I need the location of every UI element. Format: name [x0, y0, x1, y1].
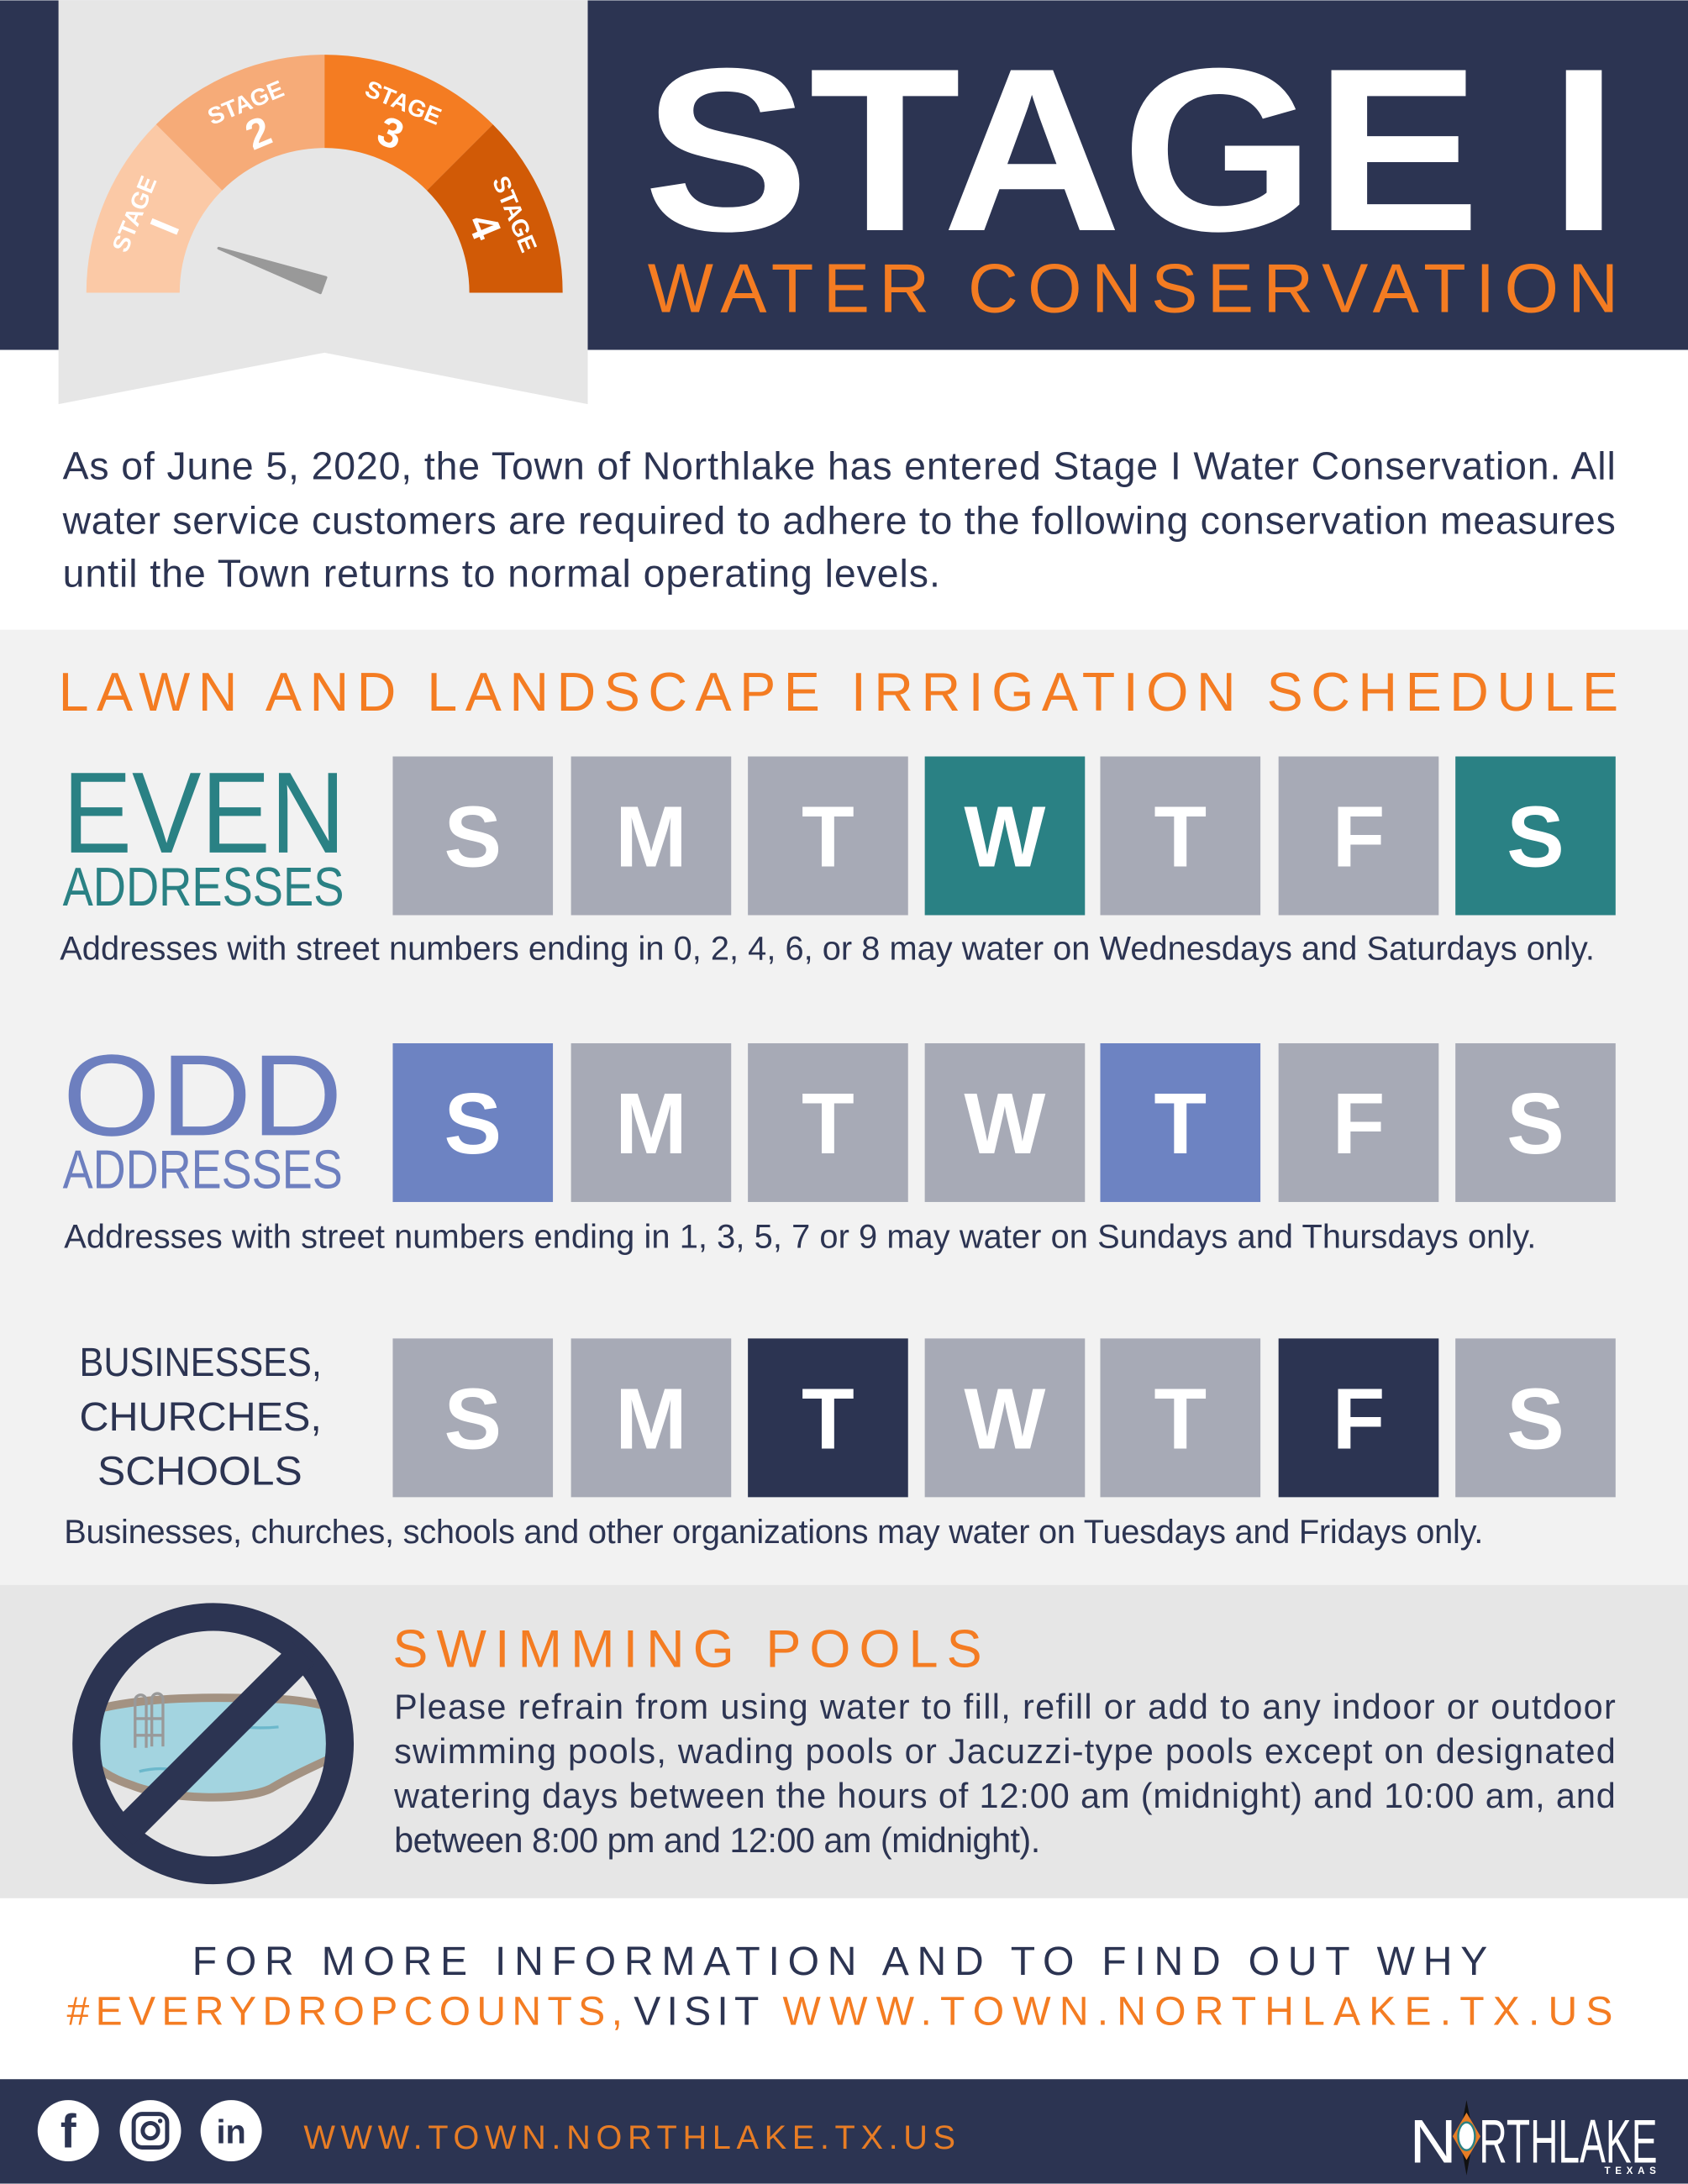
intro paragraph: [62, 444, 1616, 595]
pools paragraph: Please refrain from using water to fill, refill or add to any indoor or outdoor: [394, 1687, 1616, 1726]
businesses day grid: M: [615, 1370, 687, 1467]
more info text: WWW.TOWN.NORTHLAKE.TX.US: [783, 1989, 1612, 2034]
even caption: Addresses with street numbers ending in 0, 2, 4, 6, or 8 may water on Wednesdays and Saturdays only.: [60, 931, 1595, 968]
more info text: [67, 1939, 1612, 2034]
gauge: stage 1 sector: [87, 124, 222, 293]
odd day grid: W: [964, 1075, 1045, 1172]
gauge tab: [59, 0, 588, 404]
gauge: stage 4 sector: [427, 124, 563, 293]
gauge: stage 2 sector: [156, 55, 324, 191]
odd addresses label: ODD: [63, 1031, 343, 1160]
icon: instagram: [120, 2100, 181, 2161]
northlake logo: N: [1409, 2108, 1457, 2176]
businesses label: BUSINESSES,: [79, 1340, 322, 1385]
gauge label 3: 3: [371, 107, 411, 159]
even day grid: T: [802, 788, 855, 885]
businesses day grid: T: [802, 1370, 855, 1467]
businesses day grid: S: [444, 1370, 502, 1467]
more info text: #EVERYDROPCOUNTS,: [67, 1989, 623, 2034]
footer band: [0, 2079, 1688, 2184]
gauge: stage 3 sector: [324, 55, 493, 191]
subtitle: WATER CONSERVATION: [648, 249, 1618, 328]
northlake logo: TEXAS: [1605, 2166, 1656, 2176]
intro paragraph: As of June 5, 2020, the Town of Northlake has entered Stage I Water Conservation. All: [63, 444, 1616, 488]
pools section background: [0, 1585, 1688, 1898]
title: STAGE I: [644, 19, 1618, 280]
gauge label 2: STAGE: [203, 75, 287, 130]
more info text: FOR MORE INFORMATION AND TO FIND OUT WHY: [192, 1939, 1487, 1984]
businesses day grid: S: [1507, 1370, 1564, 1467]
pools heading: SWIMMING POOLS: [392, 1620, 982, 1679]
intro paragraph: water service customers are required to adhere to the following conservation measures: [62, 498, 1616, 542]
odd day grid: M: [615, 1075, 687, 1172]
gauge label 4: STAGE: [487, 172, 543, 256]
odd day grid: S: [1507, 1075, 1564, 1172]
even day grid: W: [964, 788, 1045, 885]
gauge label 1: STAGE: [107, 172, 161, 256]
odd day grid: S: [444, 1075, 502, 1172]
odd day grid: [392, 1043, 1616, 1202]
northlake logo: [1409, 2100, 1658, 2176]
even day grid: M: [615, 788, 687, 885]
businesses day grid: W: [964, 1370, 1045, 1467]
more info text: VISIT: [634, 1989, 759, 2034]
gauge label 4: [447, 172, 543, 272]
even day grid: [392, 757, 1616, 915]
pools paragraph: swimming pools, wading pools or Jacuzzi-type pools except on designated: [394, 1731, 1616, 1771]
businesses label: SCHOOLS: [97, 1448, 302, 1494]
icon: facebook: f: [60, 2104, 76, 2157]
even addresses label: EVEN: [63, 748, 345, 878]
pools paragraph: watering days between the hours of 12:00 am (midnight) and 10:00 am, and: [393, 1776, 1616, 1815]
irrigation heading: LAWN AND LANDSCAPE IRRIGATION SCHEDULE: [59, 661, 1618, 722]
even day grid: S: [444, 788, 502, 885]
even day grid: F: [1333, 788, 1385, 885]
icon: linkedin: in: [216, 2113, 246, 2150]
header band: [0, 0, 1688, 350]
gauge needle: [218, 249, 326, 293]
icon: linkedin: [201, 2100, 262, 2161]
businesses day grid: F: [1333, 1370, 1385, 1467]
intro paragraph: until the Town returns to normal operating levels.: [63, 551, 940, 595]
gauge label 3: [344, 75, 445, 170]
gauge label 1: I: [140, 213, 188, 241]
gauge label 1: [107, 172, 202, 272]
businesses label: [79, 1340, 322, 1494]
icon: facebook: [38, 2100, 99, 2161]
odd day grid: F: [1333, 1075, 1385, 1172]
odd day grid: T: [1154, 1075, 1207, 1172]
gauge label 2: [203, 75, 304, 170]
footer url: WWW.TOWN.NORTHLAKE.TX.US: [303, 2119, 955, 2156]
even addresses label: ADDRESSES: [63, 856, 344, 917]
pools paragraph: [393, 1687, 1616, 1860]
businesses day grid: T: [1154, 1370, 1207, 1467]
even day grid: S: [1507, 788, 1564, 885]
icon: no swimming pool: [76, 1617, 383, 1871]
odd addresses label: ADDRESSES: [63, 1138, 343, 1200]
odd caption: Addresses with street numbers ending in 1, 3, 5, 7 or 9 may water on Sundays and Thursdays only.: [64, 1219, 1536, 1256]
businesses day grid: [392, 1338, 1616, 1497]
gauge label 4: 4: [458, 207, 511, 247]
gauge label 2: 2: [239, 107, 278, 159]
irrigation section background: [0, 630, 1688, 1585]
odd day grid: T: [802, 1075, 855, 1172]
even day grid: T: [1154, 788, 1207, 885]
businesses caption: Businesses, churches, schools and other organizations may water on Tuesdays and Fridays only.: [64, 1514, 1483, 1551]
businesses label: CHURCHES,: [79, 1394, 322, 1440]
gauge label 3: STAGE: [361, 75, 445, 130]
pools paragraph: between 8:00 pm and 12:00 am (midnight).: [394, 1820, 1040, 1860]
